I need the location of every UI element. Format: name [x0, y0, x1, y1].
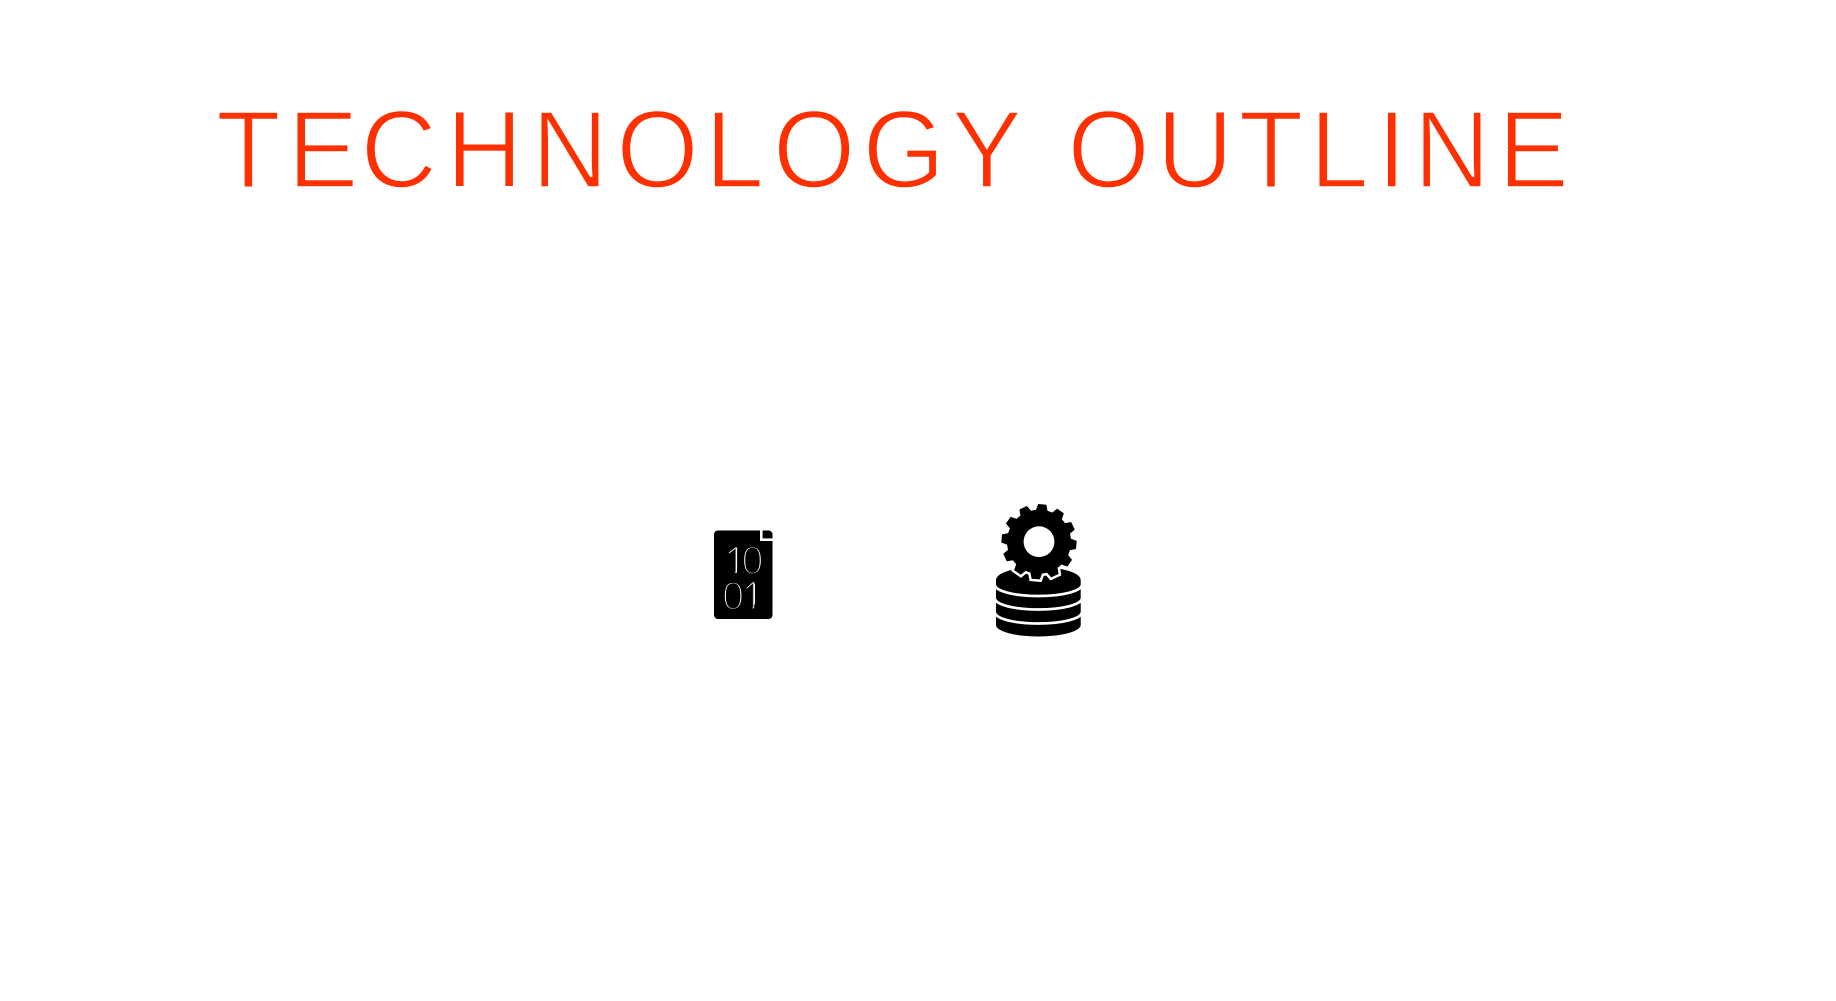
icon: binary data file: 01	[722, 574, 765, 618]
icon: binary data file	[714, 529, 774, 619]
icon: gear on database stack	[995, 504, 1082, 636]
title: TECHNOLOGY OUTLINE	[216, 88, 1569, 211]
icon: binary data file: 10	[725, 539, 764, 583]
